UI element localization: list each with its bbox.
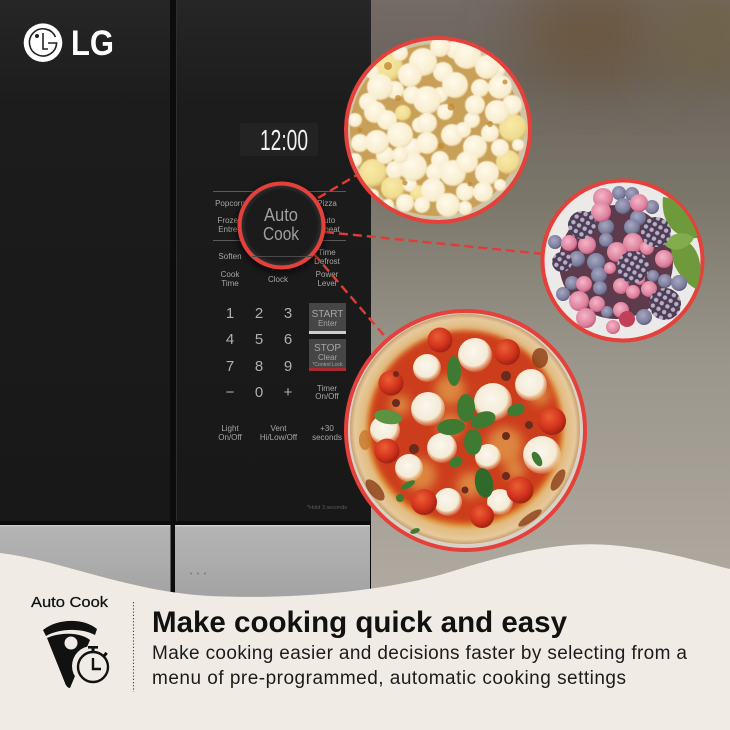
lower panel labels: *Hold 3 seconds bbox=[307, 505, 347, 511]
popcorn circle bbox=[346, 37, 530, 222]
dotted divider bbox=[132, 602, 134, 692]
cream wave footer bbox=[0, 544, 730, 730]
lower panel labels: Timer bbox=[317, 384, 337, 393]
lower panel labels: Hi/Low/Off bbox=[260, 433, 298, 442]
number keypad: 6 bbox=[284, 331, 292, 348]
start button: START bbox=[312, 309, 343, 320]
control panel labels: Cook bbox=[221, 270, 240, 279]
auto cook label: Auto Cook bbox=[31, 594, 109, 611]
description: Make cooking easier and decisions faster by selecting from a bbox=[152, 643, 687, 664]
lower panel labels: seconds bbox=[312, 433, 342, 442]
stop button: Clear bbox=[318, 353, 337, 362]
number keypad: 7 bbox=[226, 358, 234, 375]
stainless steel trim bbox=[0, 525, 371, 600]
control panel labels: Frozen bbox=[218, 216, 242, 225]
control panel labels: Entree bbox=[218, 225, 242, 234]
number keypad: 2 bbox=[255, 305, 263, 322]
control panel labels: Defrost bbox=[314, 257, 341, 266]
number keypad bbox=[226, 305, 293, 401]
control panel labels: Reheat bbox=[314, 225, 341, 234]
stop button: STOP bbox=[314, 343, 341, 354]
pizza circle bbox=[346, 311, 585, 550]
auto cook magnifier: Cook bbox=[263, 224, 300, 244]
number keypad: 4 bbox=[226, 331, 234, 348]
number keypad: − bbox=[226, 384, 235, 401]
control panel labels: Power bbox=[316, 270, 339, 279]
control panel labels: Soften bbox=[218, 252, 242, 261]
control panel labels: Auto bbox=[319, 216, 336, 225]
control panel labels: Popcorn bbox=[215, 199, 245, 208]
clock display: 12:00 bbox=[260, 125, 308, 157]
stop button bbox=[309, 339, 346, 371]
number keypad: 9 bbox=[284, 358, 292, 375]
start button bbox=[309, 303, 346, 334]
lower panel labels bbox=[218, 384, 347, 511]
control panel labels: Time bbox=[318, 248, 336, 257]
auto cook magnifier bbox=[236, 182, 328, 274]
number keypad: + bbox=[284, 384, 293, 401]
control panel labels bbox=[213, 191, 346, 288]
lower panel labels: On/Off bbox=[218, 433, 242, 442]
number keypad: 3 bbox=[284, 305, 292, 322]
mint leaves bbox=[663, 197, 701, 290]
lower panel labels: On/Off bbox=[315, 392, 339, 401]
lower panel labels: Vent bbox=[270, 424, 287, 433]
lower panel labels: +30 bbox=[320, 424, 334, 433]
LG logo: LG bbox=[71, 24, 114, 63]
number keypad: 5 bbox=[255, 331, 263, 348]
description bbox=[152, 643, 687, 689]
heading: Make cooking quick and easy bbox=[152, 606, 567, 639]
LG logo bbox=[24, 23, 114, 63]
lower panel labels: Light bbox=[221, 424, 239, 433]
description: menu of pre-programmed, automatic cooking settings bbox=[152, 668, 626, 689]
frozen berries circle bbox=[542, 180, 702, 340]
number keypad: 1 bbox=[226, 305, 234, 322]
clock display bbox=[240, 123, 318, 157]
stop button: *Control Lock bbox=[312, 362, 343, 368]
control panel labels: Level bbox=[317, 279, 337, 288]
dashed connector lines bbox=[314, 172, 544, 340]
icon: pizza slice with stopwatch bbox=[43, 621, 112, 688]
auto cook magnifier: Auto bbox=[264, 205, 298, 225]
control panel labels: Pizza bbox=[317, 199, 337, 208]
number keypad: 8 bbox=[255, 358, 263, 375]
microwave door bbox=[0, 0, 371, 525]
control panel labels: Time bbox=[221, 279, 239, 288]
control panel labels: Clock bbox=[268, 275, 289, 284]
start button: Enter bbox=[318, 319, 337, 328]
wall background bbox=[371, 0, 730, 600]
number keypad: 0 bbox=[255, 384, 263, 401]
